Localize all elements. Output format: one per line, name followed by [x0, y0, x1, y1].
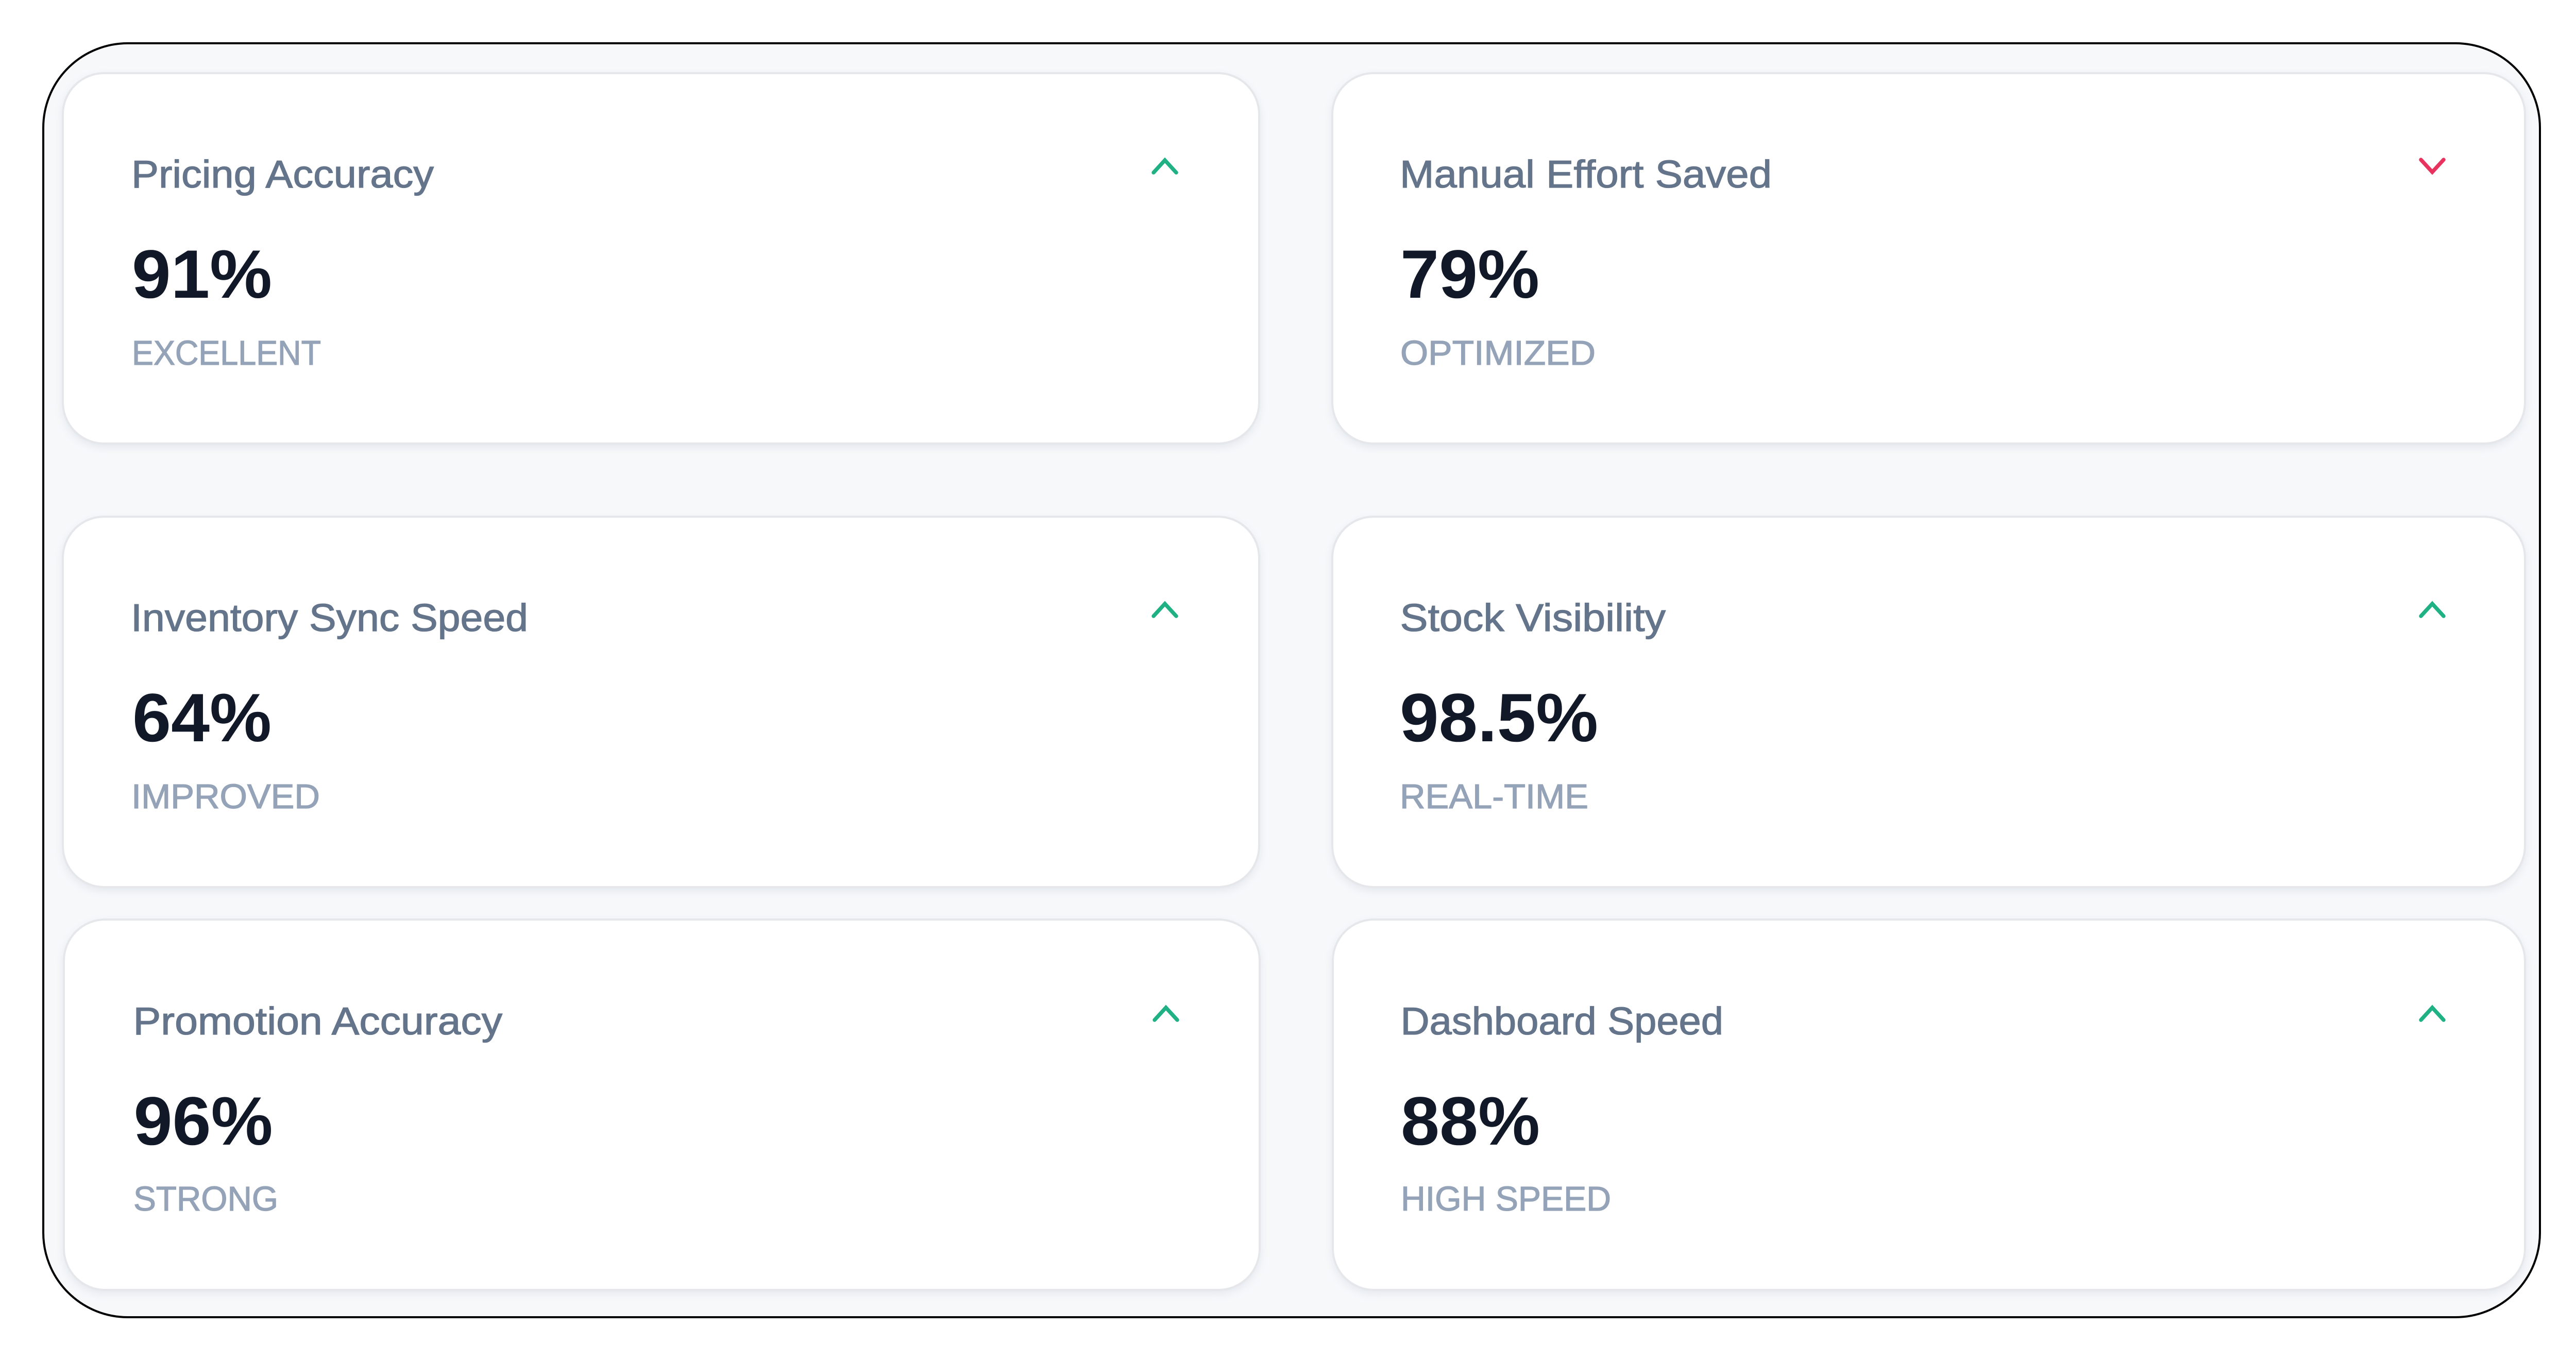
card background	[64, 920, 1260, 1290]
icon: green up chevron	[1154, 160, 1176, 173]
metric value: 79%	[1400, 236, 1539, 313]
icon: green up chevron	[2421, 1008, 2444, 1020]
metric status: OPTIMIZED	[1400, 334, 1596, 372]
metric status: STRONG	[133, 1180, 278, 1218]
panel: Inventory Sync Speed card	[63, 517, 1259, 887]
card background	[1332, 73, 2525, 444]
metric status: EXCELLENT	[132, 334, 321, 372]
panel: Manual Effort Saved card	[1332, 73, 2525, 444]
card background	[1332, 517, 2525, 887]
card background	[63, 73, 1259, 444]
icon: red down chevron	[2421, 160, 2444, 172]
metric value: 64%	[132, 680, 272, 756]
metric value: 96%	[134, 1083, 273, 1160]
card background	[1333, 920, 2525, 1290]
icon: green up chevron	[1154, 604, 1176, 616]
panel: Dashboard Speed card	[1333, 920, 2525, 1290]
card background	[63, 517, 1259, 887]
metric label: Manual Effort Saved	[1400, 152, 1772, 196]
panel: Pricing Accuracy card	[63, 73, 1259, 444]
metric status: HIGH SPEED	[1401, 1180, 1611, 1218]
metric value: 98.5%	[1400, 680, 1598, 756]
metric value: 88%	[1401, 1083, 1540, 1160]
metric label: Dashboard Speed	[1400, 999, 1723, 1043]
metric label: Inventory Sync Speed	[131, 596, 528, 639]
panel: Promotion Accuracy card	[64, 920, 1260, 1290]
metric value: 91%	[132, 236, 272, 313]
metric label: Stock Visibility	[1400, 596, 1666, 639]
icon: green up chevron	[1155, 1008, 1177, 1020]
metric status: IMPROVED	[131, 777, 320, 816]
metric status: REAL-TIME	[1400, 777, 1588, 816]
icon: green up chevron	[2421, 604, 2444, 616]
metric label: Promotion Accuracy	[133, 999, 503, 1043]
panel: Stock Visibility card	[1332, 517, 2525, 887]
metric label: Pricing Accuracy	[131, 152, 434, 196]
